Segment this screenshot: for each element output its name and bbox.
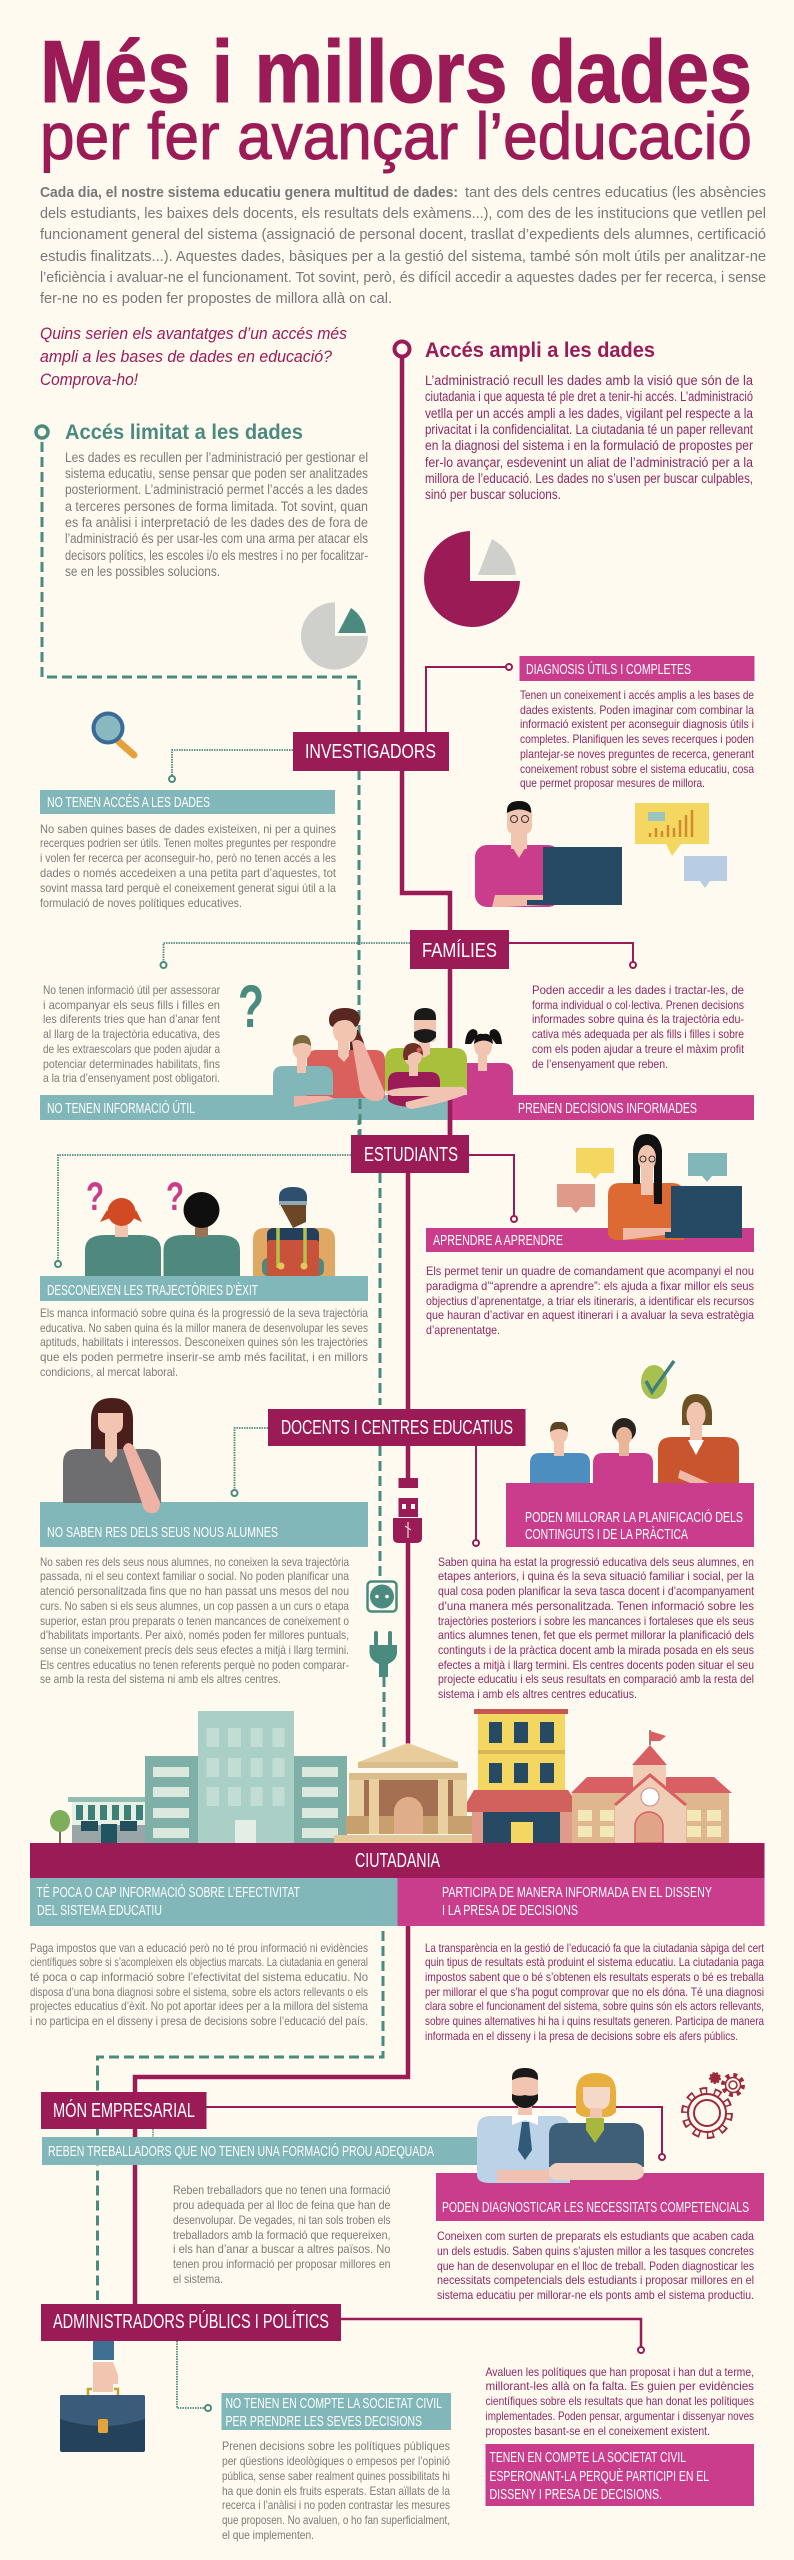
panel: limited access (65, 421, 368, 669)
text: evaluate policies: Avaluen les polítiques que han proposat i han dut a terme, (486, 2365, 754, 2379)
text: limited access: sistema educatiu, sense pensar que poden ser analitzades (65, 466, 368, 481)
heading: families (410, 930, 509, 969)
text: limited access: es fa anàlisi i interpretació de les dades des de fora de (65, 515, 368, 530)
text: informed decisions: cativa més adequada per als fills i filles i sobre (532, 1027, 744, 1041)
text: little information: Paga impostos que van a educació però no té prou informació ni evidències (30, 1941, 368, 1955)
text: limited access: se en les possibles solucions. (65, 564, 220, 579)
text: limited access: Les dades es recullen per l’administració per gestionar el (65, 450, 368, 465)
text: diagnose competency needs: un dels estudis. Saben quins s’ajusten millor a les tasques concretes (437, 2244, 754, 2258)
building: school (571, 1730, 732, 1843)
illustration: students from behind: ? (166, 1175, 184, 1219)
connector: teachers left (232, 1428, 268, 1496)
banner: take civil society into account: DISSENY I PRESA DE DECISIONS. (490, 2486, 662, 2503)
banner: informed decisions: PRENEN DECISIONS INFORMADES (518, 1100, 697, 1117)
banner: little information: TÉ POCA O CAP INFORMACIÓ SOBRE L’EFECTIVITAT (36, 1884, 300, 1901)
illustration: researcher with laptop (475, 801, 622, 907)
figure: girl right (465, 1029, 513, 1095)
timeline segments over banners (360, 1090, 450, 1135)
icon: magnifying glass (94, 714, 134, 755)
banner: inadequate training: REBEN TREBALLADORS QUE NO TENEN UNA FORMACIÓ PROU ADEQUADA (48, 2143, 434, 2160)
icon: question mark: ? (238, 973, 264, 1040)
heading: public administrators: ADMINISTRADORS PÚBLICS I POLÍTICS (53, 2310, 329, 2333)
text: learning to learn: paradigma d’“aprendre a aprendre”: els ajuda a fixar millor els seus (426, 1279, 754, 1293)
text: wide access (425, 373, 753, 502)
text: better planning: projecte educatiu i els seus resultats en comparació amb la resta del (438, 1672, 754, 1686)
text: informed decisions: com els poden ajudar a treure el màxim profit (532, 1042, 745, 1056)
text: inadequate training: Reben treballadors que no tenen una formació (173, 2183, 391, 2197)
connector: families right (509, 943, 636, 968)
text: informed participation: informada en el disseny i la presa de decisions sobre els afers públics. (425, 2029, 738, 2043)
text: inadequate training: el sistema. (173, 2272, 223, 2286)
text: useful diagnoses: dades existents. Poden imaginar com combinar la (520, 703, 754, 717)
text: inadequate training: prou adequada per al lloc de feina que han de (173, 2198, 391, 2212)
question callout (40, 325, 347, 389)
heading: business world (41, 2092, 206, 2129)
text: unknown success paths: educativa. No saben quina és la millor manera de desenvolupar les seves (40, 1321, 368, 1335)
text: limited access: posteriorment. L’administració permet l’accés a les dades (65, 482, 368, 497)
heading: students: ESTUDIANTS (364, 1144, 458, 1166)
intro text: dels estudiants, les baixes dels docents, els resultats dels exàmens...), com des de les institucions que vetllen pel (40, 206, 766, 222)
panel: students (40, 1134, 754, 1379)
text: inadequate training: i els han d’anar a buscar a altres països. No (173, 2242, 391, 2256)
text: little information: projectes educatius d’èxit. No pot aportar idees per a la millora del sistema (30, 1999, 368, 2013)
illustration: three teachers (530, 1394, 739, 1495)
connector: investigators left (169, 750, 293, 782)
banner: learning to learn (426, 1228, 754, 1252)
intro text: estudis finalitzats...). Aquestes dades, bàsiques per a la gestió del sistema, també són molt útils per analitzar-ne (40, 249, 766, 265)
text: no useful information: les diferents tries que han d’anar fent (43, 1012, 221, 1026)
banner: take civil society into account (486, 2444, 754, 2506)
building: offices (145, 1711, 347, 1843)
intro text: Cada dia, el nostre sistema educatiu genera multitud de dades: (40, 185, 458, 201)
intro text: tant des dels centres educatius (les absències (465, 185, 766, 201)
banner: no access (40, 790, 335, 814)
intro text (40, 185, 766, 307)
heading: investigators (293, 732, 449, 771)
teal dashed timeline (36, 426, 384, 2300)
banner: ignore civil society: NO TENEN EN COMPTE LA SOCIETAT CIVIL (226, 2395, 442, 2412)
text: evaluate policies (486, 2365, 754, 2438)
illustration: cityscape (50, 1709, 732, 1843)
connector: administrators right (341, 2319, 644, 2353)
text: useful diagnoses: informació existent per aconseguir diagnosis útils i (520, 717, 754, 731)
text: no useful information: potenciar determinades habilitats, fins (43, 1057, 220, 1071)
connector: business left (152, 2129, 154, 2137)
text: better planning: antics alumnes tenen, fet que els permet millorar la planificació dels (438, 1628, 754, 1642)
text: learning to learn: Els permet tenir un quadre de comandament que acompanyi el nou (426, 1264, 754, 1278)
text: informed decisions: Poden accedir a les dades i tractar-les, de (532, 983, 744, 997)
text: unknown success paths: Els manca informació sobre quina és la progressió de la seva trajectòria (40, 1306, 368, 1320)
illustration: students from behind: ? (86, 1175, 104, 1219)
figure: child in front (385, 1043, 467, 1109)
figure: father (385, 1008, 467, 1100)
text: wide access: L’administració recull les dades amb la visió que són de la (425, 373, 753, 388)
icon: electric plug (370, 1631, 397, 1677)
intro text: funcionament general del sistema (assignació de personal docent, trasllat d’expedients dels alumnes, certificació (40, 227, 766, 243)
panel: public administrators (41, 2304, 754, 2542)
illustration: family (273, 1008, 513, 1109)
connector: investigators right (426, 664, 512, 732)
banner: informed decisions (449, 1095, 754, 1120)
figure: mother (307, 1008, 385, 1101)
text: no useful information (43, 983, 221, 1085)
text: no access: i volen fer recerca per aconseguir-ho, però no tenen accés a les (40, 851, 336, 865)
icon: blue speech bubble (684, 856, 727, 888)
text: ignore civil society: Prenen decisions sobre les polítiques públiques (222, 2439, 450, 2453)
text: informed decisions (532, 983, 745, 1071)
text: better planning (438, 1555, 755, 1701)
pie chart: wide access (424, 531, 520, 627)
question callout: Comprova-ho! (40, 371, 138, 389)
text: learning to learn: que hauran d’activar en aquest itinerari i a avaluar la seva estratègia (426, 1308, 754, 1322)
question callout: ampli a les bases de dades en educació? (40, 348, 333, 366)
figure: son (273, 1035, 335, 1107)
banner: unknown success paths: DESCONEIXEN LES TRAJECTÒRIES D’ÈXIT (47, 1282, 258, 1299)
text: wide access: en la diagnosi del sistema i en la formulació de propostes per (425, 438, 753, 453)
banner: ignore civil society (222, 2393, 451, 2430)
text: ignore civil society: recerca i l’anàlisi i no poden contrastar les mesures (222, 2498, 450, 2512)
main magenta timeline (135, 342, 450, 2304)
text: no access: sovint massa tard perquè el coneixement generat sigui útil a la (40, 881, 336, 895)
text: nothing known about new pupils: No saben res dels seus nous alumnes, no coneixen la seva trajectòria (40, 1555, 349, 1569)
banner: better planning (506, 1483, 754, 1547)
text: limited access: l’administració és per usar-les com una arma per atacar els (65, 531, 368, 546)
text: no useful information: i acompanyar els seus fills i filles en (43, 998, 220, 1012)
text: little information (30, 1941, 368, 2028)
text: limited access (65, 450, 368, 579)
text: no useful information: al llarg de la trajectòria educativa, des (43, 1027, 220, 1041)
text: evaluate policies: científiques sobre els resultats que han donat les polítiques (486, 2394, 754, 2408)
text: inadequate training: tenen prou informació per proposar millores en (173, 2257, 390, 2271)
icon: gears (685, 2073, 742, 2135)
panel: families (40, 930, 754, 1135)
connector: business right (206, 2107, 665, 2160)
icon: check mark (641, 1361, 674, 1399)
text: no access: No saben quines bases de dades existeixen, ni per a quines (40, 822, 336, 836)
panel: investigators (40, 656, 755, 910)
title: per fer avançar l’educació (40, 99, 752, 173)
text: ignore civil society: el que implementen. (222, 2528, 314, 2542)
illustration: student with laptop and bubbles (557, 1134, 742, 1240)
text: no access: recerques podrien ser útils. Tenen moltes preguntes per respondre (40, 836, 336, 850)
text: learning to learn: d’aprenentatge. (426, 1323, 500, 1337)
text: informed decisions: de l’ensenyament que reben. (532, 1057, 668, 1071)
text: wide access: fer-lo avançar, esdevenint un aliat de l’administració per a la (425, 455, 753, 470)
text: ignore civil society: ha que donin els fruits esperats. Estan aïllats de la (222, 2484, 450, 2498)
text: useful diagnoses (520, 688, 755, 790)
text: better planning: continguts i de la pràctica docent amb la mirada posada en els seus (438, 1643, 754, 1657)
text: unknown success paths: condicions, al mercat laboral. (40, 1365, 178, 1379)
banner: diagnose competency needs (436, 2173, 764, 2221)
text: diagnose competency needs (437, 2229, 754, 2302)
title (40, 22, 752, 173)
text: little information: i no participa en el disseny i presa de decisions sobre l’educació del país. (30, 2014, 368, 2028)
banner: no useful information (40, 1095, 449, 1120)
heading: public administrators (41, 2304, 341, 2341)
text: useful diagnoses: completes. Planifiquen les seves recerques i poden (520, 732, 754, 746)
building: temple (334, 1743, 481, 1843)
text: better planning: sistema i amb els altres centres educatius. (438, 1687, 637, 1701)
panel: business world (41, 2068, 764, 2302)
text: little information: disposa d’una bona diagnosi sobre el sistema, sobre els actors rellevants o els (30, 1985, 368, 1999)
banner: nothing known about new pupils: NO SABEN RES DELS SEUS NOUS ALUMNES (47, 1524, 278, 1541)
text: learning to learn: objectius d’aprenentatge, a triar els itineraris, a identificar els recursos (426, 1294, 754, 1308)
banner: take civil society into account: TENEN EN COMPTE LA SOCIETAT CIVIL (490, 2449, 686, 2466)
illustration: business people (477, 2068, 644, 2183)
text: limited access: a terceres persones de forma limitada. Tot sovint, quan (65, 499, 368, 514)
banner: inadequate training (42, 2137, 478, 2165)
text: evaluate policies: propostes basant-se en el coneixement existent. (486, 2424, 710, 2438)
text: better planning: d’una manera més personalitzada. Tenen informació sobre les (438, 1599, 754, 1613)
text: useful diagnoses: plantejar-se noves preguntes de recerca, generant (520, 747, 755, 761)
banner: no useful information: NO TENEN INFORMACIÓ ÚTIL (47, 1100, 195, 1117)
text: nothing known about new pupils: se amb la resta del sistema ni amb els altres centres. (40, 1672, 281, 1686)
text: informed decisions: informades sobre quina és la trajectòria edu- (532, 1012, 744, 1026)
text: nothing known about new pupils: passada, ni el seu context familiar o social. No poden planificar una (40, 1569, 349, 1583)
text: little information: té poca o cap informació sobre l’efectivitat del sistema educatiu. No (30, 1970, 368, 1984)
text: nothing known about new pupils: atenció personalitzada fins que no han passat uns mesos del nou (40, 1584, 349, 1598)
text: nothing known about new pupils: Els centres educatius no tenen referents perquè no poden comparar- (40, 1658, 349, 1672)
banner: unknown success paths (40, 1276, 368, 1301)
banner: nothing known about new pupils (40, 1502, 368, 1547)
building: shop (68, 1797, 145, 1843)
icon: hand with briefcase (60, 2341, 145, 2452)
text: nothing known about new pupils: sense un coneixement precís dels seus efectes a mitjà i llarg termini. (40, 1643, 349, 1657)
text: nothing known about new pupils (40, 1555, 349, 1686)
text: unknown success paths (40, 1306, 368, 1379)
intro text: l’eficiència i avaluar-ne el funcionament. Tot sovint, però, és difícil accedir a aquestes dades per fer recerca, i sense (40, 270, 766, 286)
illustration: thoughtful teacher (63, 1398, 161, 1513)
text: learning to learn (426, 1264, 754, 1337)
intro text: fer-ne no es poden fer propostes de millora allà on cal. (40, 291, 392, 307)
panel: wide access (424, 339, 753, 627)
banner: no access: NO TENEN ACCÉS A LES DADES (47, 794, 210, 811)
text: ignore civil society: per qüestions ideològiques o empesos per l’opinió (222, 2454, 450, 2468)
connector: students left (55, 1155, 351, 1267)
text: diagnose competency needs: Coneixen com surten de preparats els estudiants que acaben cada (437, 2229, 754, 2243)
text: unknown success paths: aptituds, habilitats i interessos. Desconeixen quines són les trajectòries (40, 1335, 368, 1349)
text: no access: formulació de noves polítiques educatives. (40, 896, 242, 910)
text: unknown success paths: que els poden permetre inserir-se amb més facilitat, i en millors (40, 1350, 368, 1364)
text: evaluate policies: millorant-les allà on fa falta. Es guien per evidències (486, 2379, 754, 2393)
text: wide access: vetlla per un accés ampli a les dades, vigilant pel respecte a la (425, 406, 753, 421)
heading: wide access: Accés ampli a les dades (425, 339, 655, 362)
pie chart: limited access (301, 602, 368, 669)
panel: teachers and schools (40, 1361, 755, 1701)
heading: citizens: CIUTADANIA (355, 1850, 440, 1872)
heading: limited access: Accés limitat a les dades (65, 421, 303, 444)
text: no useful information: de les extraescolars que poden ajudar a (43, 1042, 220, 1056)
text: better planning: etapes anteriors, i quina és la seva situació familiar i social, per la (438, 1569, 754, 1583)
heading: teachers and schools (268, 1409, 526, 1446)
panel: citizens (30, 1843, 765, 2043)
icon: socket (368, 1582, 396, 1612)
text: diagnose competency needs: sistema educatiu per millorar-ne els ponts amb el sistema productiu. (437, 2288, 754, 2302)
text: useful diagnoses: Tenen un coneixement i accés amplis a les bases de (520, 688, 754, 702)
banner: ignore civil society: PER PRENDRE LES SEVES DECISIONS (226, 2413, 422, 2430)
banner: better planning: CONTINGUTS I DE LA PRÀCTICA (525, 1526, 688, 1543)
banner: informed participation (398, 1878, 764, 1926)
banner: informed participation: I LA PRESA DE DECISIONS (442, 1902, 578, 1919)
connector: teachers right (473, 1446, 479, 1546)
text: useful diagnoses: que permet proposar mesures de millora. (520, 776, 705, 790)
text: better planning: qual cosa poden planificar la seva tasca docent i d’acompanyament (438, 1584, 755, 1598)
text: no useful information: a la tria d’ensenyament post obligatori. (43, 1071, 220, 1085)
icon: chart speech bubble (635, 803, 709, 856)
text: useful diagnoses: coneixement robust sobre el sistema educatiu, cosa (520, 762, 754, 776)
text: ignore civil society (222, 2439, 450, 2542)
text: inadequate training: desenvolupar. De vegades, ni tan sols troben els (173, 2213, 390, 2227)
text: better planning: Saben quina ha estat la progressió educativa dels seus alumnes, en (438, 1555, 754, 1569)
icon: tree (50, 1810, 70, 1843)
banner: little information (30, 1878, 398, 1926)
connector: students right (469, 1155, 517, 1222)
text: ignore civil society: que proposen. No avaluen, o ho fan superficialment, (222, 2513, 450, 2527)
text: inadequate training: treballadors amb la formació que requereixen, (173, 2228, 390, 2242)
building: yellow block (467, 1709, 576, 1843)
text: nothing known about new pupils: d’habilitats importants. Per això, només poden fer millores puntuals, (40, 1628, 349, 1642)
heading: investigators: INVESTIGADORS (305, 741, 436, 763)
text: limited access: decisors polítics, les escoles i/o els mestres i no per focalitzar- (65, 548, 368, 563)
text: informed decisions: forma individual o col·lectiva. Prenen decisions (532, 998, 744, 1012)
connector: families left (160, 943, 410, 968)
heading: business world: MÓN EMPRESARIAL (53, 2099, 195, 2122)
question callout: Quins serien els avantatges d’un accés més (40, 325, 347, 343)
text: no useful information: No tenen informació útil per assessorar (43, 983, 220, 997)
icon: USB plug (393, 1478, 422, 1543)
text: no access: dades o només accedeixen a una petita part d’aquestes, tot (40, 866, 337, 880)
text: inadequate training (173, 2183, 391, 2286)
text: no access (40, 822, 337, 910)
banner: learning to learn: APRENDRE A APRENDRE (433, 1232, 563, 1249)
text: diagnose competency needs: necessitats competencials dels estudiants i proposar millores en el (437, 2273, 754, 2287)
connector: administrators left (177, 2341, 211, 2411)
text: nothing known about new pupils: curs. No saben si els seus alumnes, un cop passen a un curs o etapa (40, 1599, 349, 1613)
text: little information: científiques sobre si s’acompleixen els objectius marcats. La ciutadania en general (30, 1955, 368, 1969)
text: better planning: efectes a mitjà i llarg termini. Els centres docents poden situar el seu (438, 1658, 754, 1672)
text: ignore civil society: pública, sense saber realment quines possibilitats hi (222, 2469, 450, 2483)
heading: citizens (30, 1843, 764, 1878)
text: nothing known about new pupils: superior, estan prou preparats o tenen mancances de coneixement o (40, 1614, 349, 1628)
banner: little information: DEL SISTEMA EDUCATIU (37, 1902, 162, 1919)
text: wide access: sinó per buscar solucions. (425, 487, 561, 502)
banner: useful diagnoses: DIAGNOSIS ÚTILS I COMPLETES (526, 661, 691, 678)
heading: families: FAMÍLIES (422, 939, 497, 962)
illustration: students from behind (85, 1175, 335, 1276)
text: diagnose competency needs: que han de desenvolupar en el lloc de treball. Poden diagnosticar les (437, 2259, 754, 2273)
banner: useful diagnoses (520, 656, 754, 681)
text: informed participation (425, 1941, 765, 2043)
heading: students (351, 1135, 469, 1173)
heading: teachers and schools: DOCENTS I CENTRES EDUCATIUS (281, 1417, 513, 1439)
